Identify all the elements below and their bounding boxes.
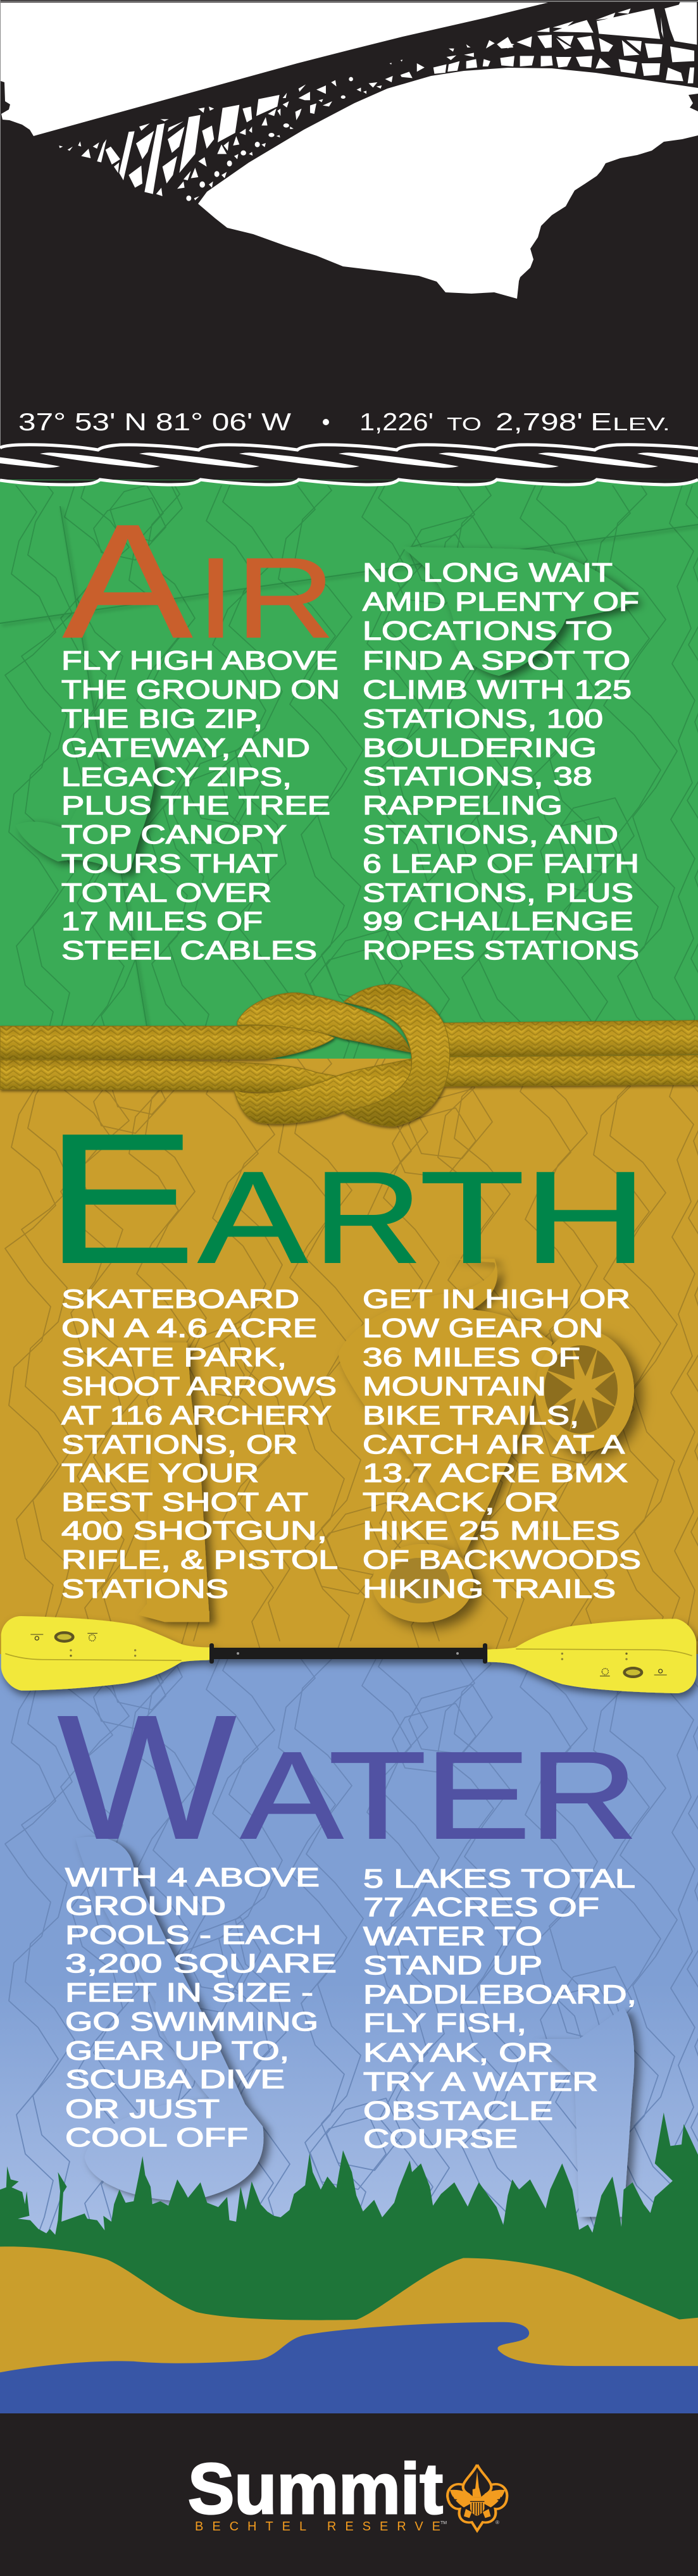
coordinates and elevation line: LEV. [613,414,670,435]
heading: Water: E [424,1726,531,1865]
heading: Air: R [236,535,335,662]
text block: earth right column: CATCH AIR AT A [363,1429,625,1459]
text block: earth left column: AT 116 ARCHERY [61,1400,332,1430]
heading: Earth: E [45,1095,196,1302]
text block: earth right column: 13.7 ACRE BMX [363,1458,628,1488]
zip cable fold lines [0,506,698,1026]
text block: earth right column: TRACK, OR [363,1487,559,1517]
text block: air left column: 17 MILES OF [61,906,263,936]
text block: earth left column: BEST SHOT AT [61,1487,308,1517]
text block: water right column [363,1864,637,2153]
text block: water right column: STAND UP [363,1950,542,1980]
sandy shore [0,2246,698,2414]
text block: earth left column: ON A 4.6 ACRE [61,1313,317,1343]
text block: air right column: 99 CHALLENGE [363,906,633,936]
text block: water left column: POOLS - EACH [65,1920,321,1950]
text block: water left column: 3,200 SQUARE [65,1948,337,1978]
kayak paddle [1,1616,696,1693]
heading: Air: I [196,535,235,662]
text block: water left column: FEET IN SIZE - [65,1977,313,2007]
text block: air right column: LOCATIONS TO [363,616,613,645]
text block: air right column: NO LONG WAIT [363,557,613,587]
text block: earth right column: LOW GEAR ON [363,1313,603,1343]
text block: air right column: CLIMB WITH 125 [363,675,632,704]
text block: air right column: STATIONS, AND [363,819,618,849]
text block: air left column: TOURS THAT [61,849,278,878]
gorge opening under the arch [198,68,698,299]
text block: air left column: THE BIG ZIP, [61,704,263,733]
text block: air left column: TOP CANOPY [61,819,287,849]
footer band [0,2413,698,2576]
text block: earth right column: GET IN HIGH OR [363,1284,630,1314]
text block: water left column: GROUND [65,1891,226,1920]
text block: air right column: FIND A SPOT TO [363,645,630,675]
paddle shaft [209,1643,487,1664]
text block: water left column: SCUBA DIVE [65,2064,285,2094]
BMX rider paper-cut silhouette [339,1259,552,1557]
text block: air right column: STATIONS, 38 [363,761,592,791]
coordinates and elevation line [18,409,670,436]
bridge truss openings, east half and tower [356,2,697,94]
text block: water right column: OBSTACLE [363,2096,553,2125]
heading: Water [58,1679,638,1876]
text block: water left column: GEAR UP TO, [65,2036,289,2065]
BMX lower wheel [372,1544,473,1622]
forest silhouette [0,2112,698,2414]
text block: earth left column: STATIONS, OR [61,1429,297,1459]
text block: air right column: ROPES STATIONS [363,935,639,965]
text block: earth right column: MOUNTAIN [363,1371,546,1401]
panel: rope band under elevation line [0,445,698,485]
bridge truss openings, west half [59,77,353,201]
heading: Water: R [529,1726,638,1865]
logo wordmark: Summit [188,2449,443,2529]
text block: air left column: LEGACY ZIPS, [61,762,292,792]
text block: water left column [65,1862,337,2152]
swimmer paper-cut silhouette [535,2008,634,2217]
text block: earth left column: SKATE PARK, [61,1342,287,1372]
text block: water right column: PADDLEBOARD, [363,1979,637,2009]
text block: water right column: COURSE [363,2124,518,2153]
text block: air right column: STATIONS, PLUS [363,878,633,907]
text block: air right column: 6 LEAP OF FAITH [363,849,639,878]
zip rider paper-cut silhouette [16,547,637,874]
heading: Air: A [63,491,192,672]
left paddle blade [1,1616,210,1691]
text block: earth right column [363,1284,641,1603]
text block: earth left column: RIFLE, & PISTOL [61,1545,338,1574]
heading: Water: T [328,1726,427,1865]
text block: water right column: WATER TO [363,1921,542,1951]
heading: Water: A [240,1726,343,1865]
text block: earth left column: 400 SHOTGUN, [61,1515,327,1545]
text block: water right column: FLY FISH, [363,2008,527,2038]
coordinates and elevation line: E [590,409,612,436]
text block: earth left column: STATIONS [61,1574,228,1603]
BMX upper wheel [535,1330,634,1452]
heading: Earth: A [198,1145,308,1290]
text block: earth right column: HIKE 25 MILES [363,1515,620,1545]
text block: earth right column: 36 MILES OF [363,1342,580,1372]
text block: air left column: FLY HIGH ABOVE [61,645,338,675]
logo: Summit Bechtel Reserve: ® [495,2520,499,2525]
heading: Water: W [58,1679,238,1876]
text block: air left column: STEEL CABLES [61,935,317,965]
rope with square knot [0,985,698,1126]
text block: air right column: RAPPELING [363,790,563,820]
icon: fleur-de-lis emblem [447,2465,507,2530]
landscape: forest, shore and lake [0,2112,698,2414]
text block: water right column: KAYAK, OR [363,2038,553,2067]
text block: air right column [363,557,639,965]
text block: air left column: THE GROUND ON [61,675,340,704]
heading: Earth [45,1095,647,1302]
right paddle blade [487,1619,696,1693]
logo: Summit Bechtel Reserve: TM [440,2521,447,2525]
logo tagline: BECHTEL RESERVE [195,2520,440,2534]
heading: Earth: R [313,1145,422,1290]
heading: Earth: H [523,1145,647,1290]
text block: earth left column: SHOOT ARROWS [61,1371,337,1401]
text block: water left column: COOL OFF [65,2122,248,2152]
archer paper-cut silhouette [138,1342,209,1622]
panel: air section background [0,466,698,1086]
text block: air right column: STATIONS, 100 [363,704,603,733]
text block: air right column: AMID PLENTY OF [363,587,639,616]
text block: earth right column: OF BACKWOODS [363,1545,641,1574]
text block: air left column [61,645,340,965]
text block: earth left column: TAKE YOUR [61,1458,259,1488]
text block: air left column: GATEWAY, AND [61,733,310,762]
text block: air left column: PLUS THE TREE [61,790,330,820]
text block: earth right column: HIKING TRAILS [363,1574,616,1603]
text block: air right column: BOULDERING [363,733,597,762]
text block: water left column: WITH 4 ABOVE [65,1862,320,1892]
lake [0,2322,698,2414]
text block: water right column: TRY A WATER [363,2067,598,2096]
coordinates and elevation line: TO [447,414,482,435]
heading: Air [63,491,335,672]
text block: air left column: TOTAL OVER [61,878,271,907]
coordinates and elevation line: 37° 53' N 81° 06' W [18,409,291,436]
text block: water right column: 77 ACRES OF [363,1892,599,1922]
text block: water left column: OR JUST [65,2094,220,2124]
coordinates and elevation line: 2,798' [495,409,583,436]
text block: earth left column: SKATEBOARD [61,1284,299,1314]
text block: water right column: 5 LAKES TOTAL [363,1864,635,1893]
text block: earth right column: BIKE TRAILS, [363,1400,579,1430]
heading: Earth: T [420,1145,525,1290]
coordinates and elevation line: 1,226' [359,409,433,436]
text block: water left column: GO SWIMMING [65,2007,318,2036]
logo: Summit Bechtel Reserve [188,2449,507,2534]
sky above the bridge [1,3,548,136]
panel: water section background [0,1635,698,2287]
text block: earth left column [61,1284,338,1603]
panel: earth section background [0,1040,698,1660]
paddler paper-cut silhouette [76,1837,264,2201]
